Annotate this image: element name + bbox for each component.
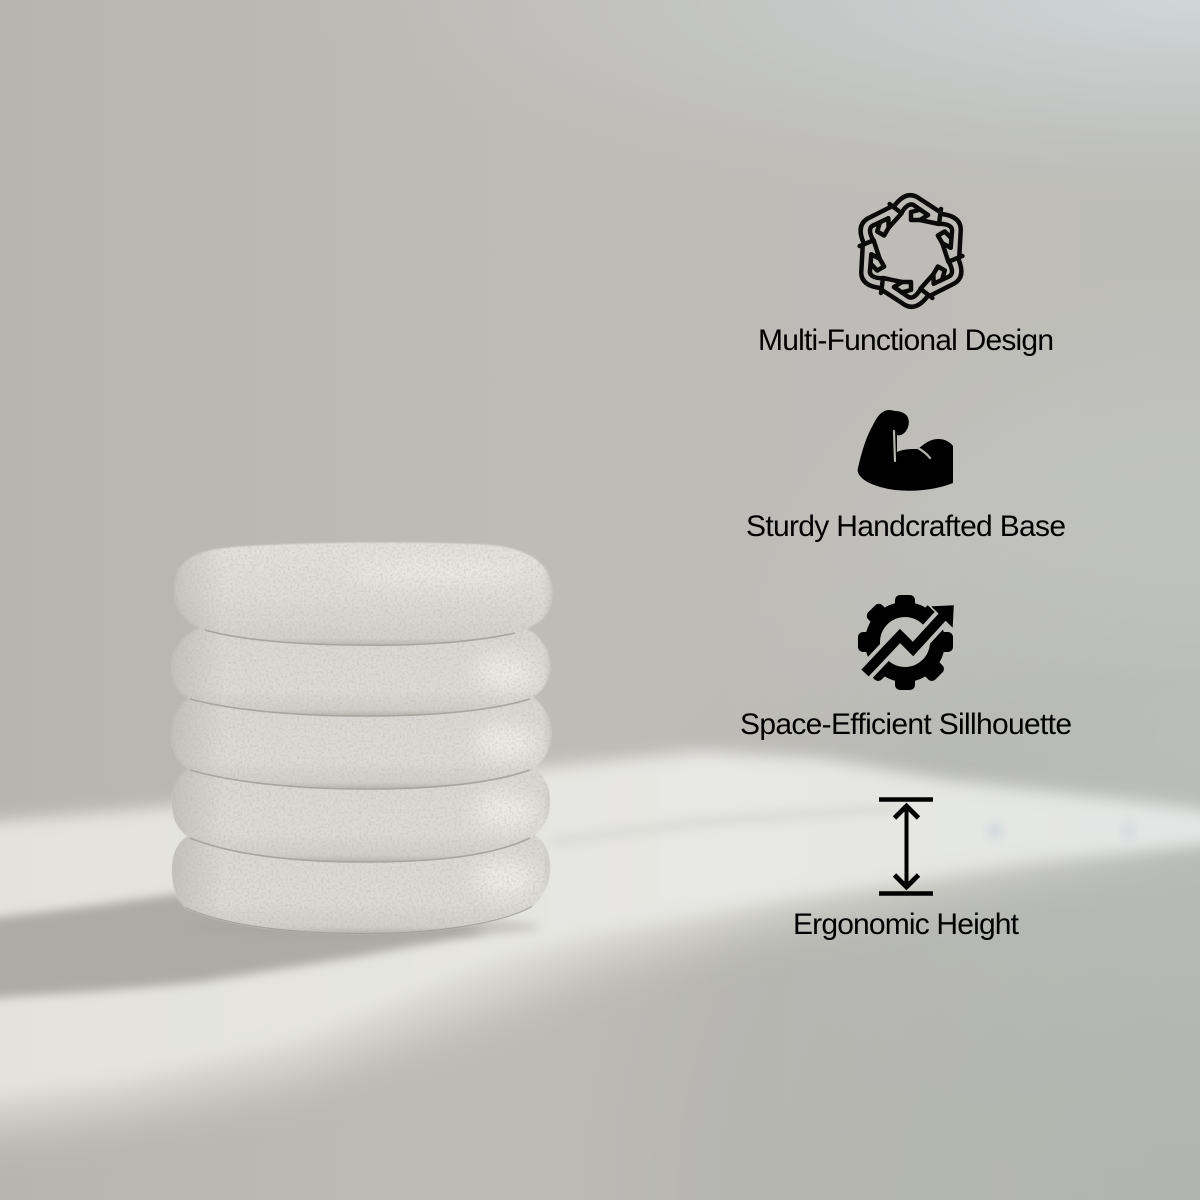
label: Sturdy Handcrafted Base bbox=[746, 510, 1066, 543]
icon: flexed arm bbox=[858, 410, 953, 491]
icon: ring of arrows bbox=[848, 195, 974, 307]
features column bbox=[740, 195, 1072, 941]
ring 4 bbox=[172, 764, 550, 862]
feature: sturdy handcrafted base bbox=[746, 410, 1066, 543]
shadow of stool bbox=[0, 892, 490, 1000]
ring 2 bbox=[172, 628, 550, 716]
icon: gear with rising arrow bbox=[858, 595, 953, 690]
sunlight on floor bbox=[0, 751, 1200, 1100]
product: stacked boucle stool bbox=[165, 535, 560, 940]
contact shadow bbox=[184, 918, 540, 936]
ring 5 (base) bbox=[172, 832, 550, 934]
feature: space-efficient silhouette bbox=[740, 595, 1072, 741]
label: Space-Efficient Sillhouette bbox=[740, 708, 1072, 741]
faint window bar shadow bbox=[552, 808, 900, 842]
feature: ergonomic height bbox=[793, 800, 1020, 941]
highlights, seams and boucle texture bbox=[165, 535, 560, 940]
feature: multi-functional design bbox=[758, 195, 1054, 357]
soft outer sunlight spill bbox=[0, 800, 1199, 1130]
ring 1 (top cushion) bbox=[175, 543, 552, 645]
label: Multi-Functional Design bbox=[758, 324, 1054, 357]
faint blue spots bbox=[986, 822, 1004, 840]
icon: height arrow between bars bbox=[879, 800, 933, 894]
ring 3 bbox=[172, 695, 551, 789]
label: Ergonomic Height bbox=[793, 908, 1020, 941]
